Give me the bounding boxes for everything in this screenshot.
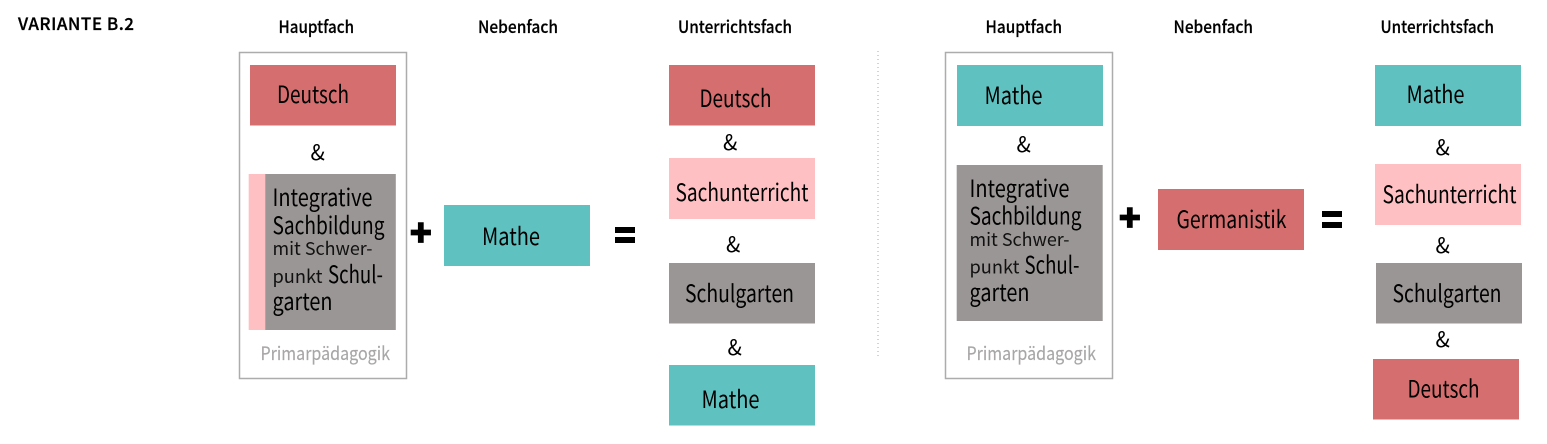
box: Mathe [1375,65,1521,126]
box: Sachunterricht [669,158,815,219]
box: Integrative Sachbildung: punkt [272,263,323,289]
box: Sachunterricht [1375,164,1521,225]
box: Integrative Sachbildung [957,165,1103,321]
column headings: right: Unterrichtsfach [1380,13,1494,38]
ampersand: & [1436,132,1450,162]
box: Sachunterricht: Sachunterricht [1382,175,1516,210]
box: Integrative Sachbildung: Integrative [272,178,372,213]
ampersand: & [728,332,742,362]
column headings: left: Nebenfach [478,13,558,38]
box: Deutsch [669,65,815,126]
ampersand: & [723,127,737,157]
column headings: right [986,13,1494,38]
ampersand: & [726,229,740,259]
box: Deutsch [250,65,396,126]
title: VARIANTE B.2 [17,10,134,35]
column: right Unterrichtsfach [1373,65,1522,420]
box: Integrative Sachbildung: Schul- [328,255,383,290]
box: Germanistik: Germanistik [1176,200,1286,235]
label: Primarpädagogik: Primarpädagogik [966,340,1097,366]
box: Integrative Sachbildung: mit Schwer- [970,226,1070,252]
box: Integrative Sachbildung: Sachbildung [970,196,1082,232]
panel: right Hauptfach [946,52,1112,378]
box: Integrative Sachbildung: Schul- [1024,246,1080,280]
box: Integrative Sachbildung: mit Schwer- [272,235,372,261]
box: Integrative Sachbildung [249,174,396,330]
box: Mathe [444,205,590,266]
box: Mathe: Mathe [984,76,1042,111]
column headings: left [278,13,792,38]
plus sign: + [1119,197,1141,238]
box: Mathe: Mathe [482,217,540,252]
ampersand: & [1016,129,1031,159]
column: left Unterrichtsfach [669,65,815,426]
panel: left Hauptfach [240,52,406,378]
box: Deutsch: Deutsch [700,79,772,114]
box: Schulgarten [1376,263,1522,324]
box: Mathe [957,65,1103,126]
box: Integrative Sachbildung: garten [272,282,332,317]
box: Sachunterricht: Sachunterricht [676,173,808,208]
box: Deutsch [1373,359,1519,420]
box: Schulgarten [669,263,815,324]
ampersand: & [1436,324,1450,354]
column headings: right: Nebenfach [1174,13,1253,38]
column headings: left: Unterrichtsfach [678,13,792,38]
box: Mathe: Mathe [1406,75,1464,110]
box: Mathe [669,365,815,426]
label: Primarpädagogik: Primarpädagogik [260,340,391,366]
box: Integrative Sachbildung: garten [970,273,1030,308]
equals sign [615,227,635,243]
box: Integrative Sachbildung: Integrative [970,169,1070,204]
box: Schulgarten: Schulgarten [1392,274,1502,309]
box: Schulgarten: Schulgarten [685,274,794,309]
ampersand: & [310,137,325,167]
column headings: left: Hauptfach [278,13,354,38]
ampersand: & [1436,230,1450,260]
equals sign [1322,211,1342,228]
box: Germanistik [1158,189,1304,250]
box: Deutsch: Deutsch [277,75,349,110]
box: Integrative Sachbildung: punkt [970,254,1020,280]
box: Mathe: Mathe [702,380,760,415]
box: Deutsch: Deutsch [1408,370,1480,404]
box: Integrative Sachbildung: Sachbildung [272,206,385,241]
plus sign: + [410,212,432,253]
column headings: right: Hauptfach [986,13,1062,38]
